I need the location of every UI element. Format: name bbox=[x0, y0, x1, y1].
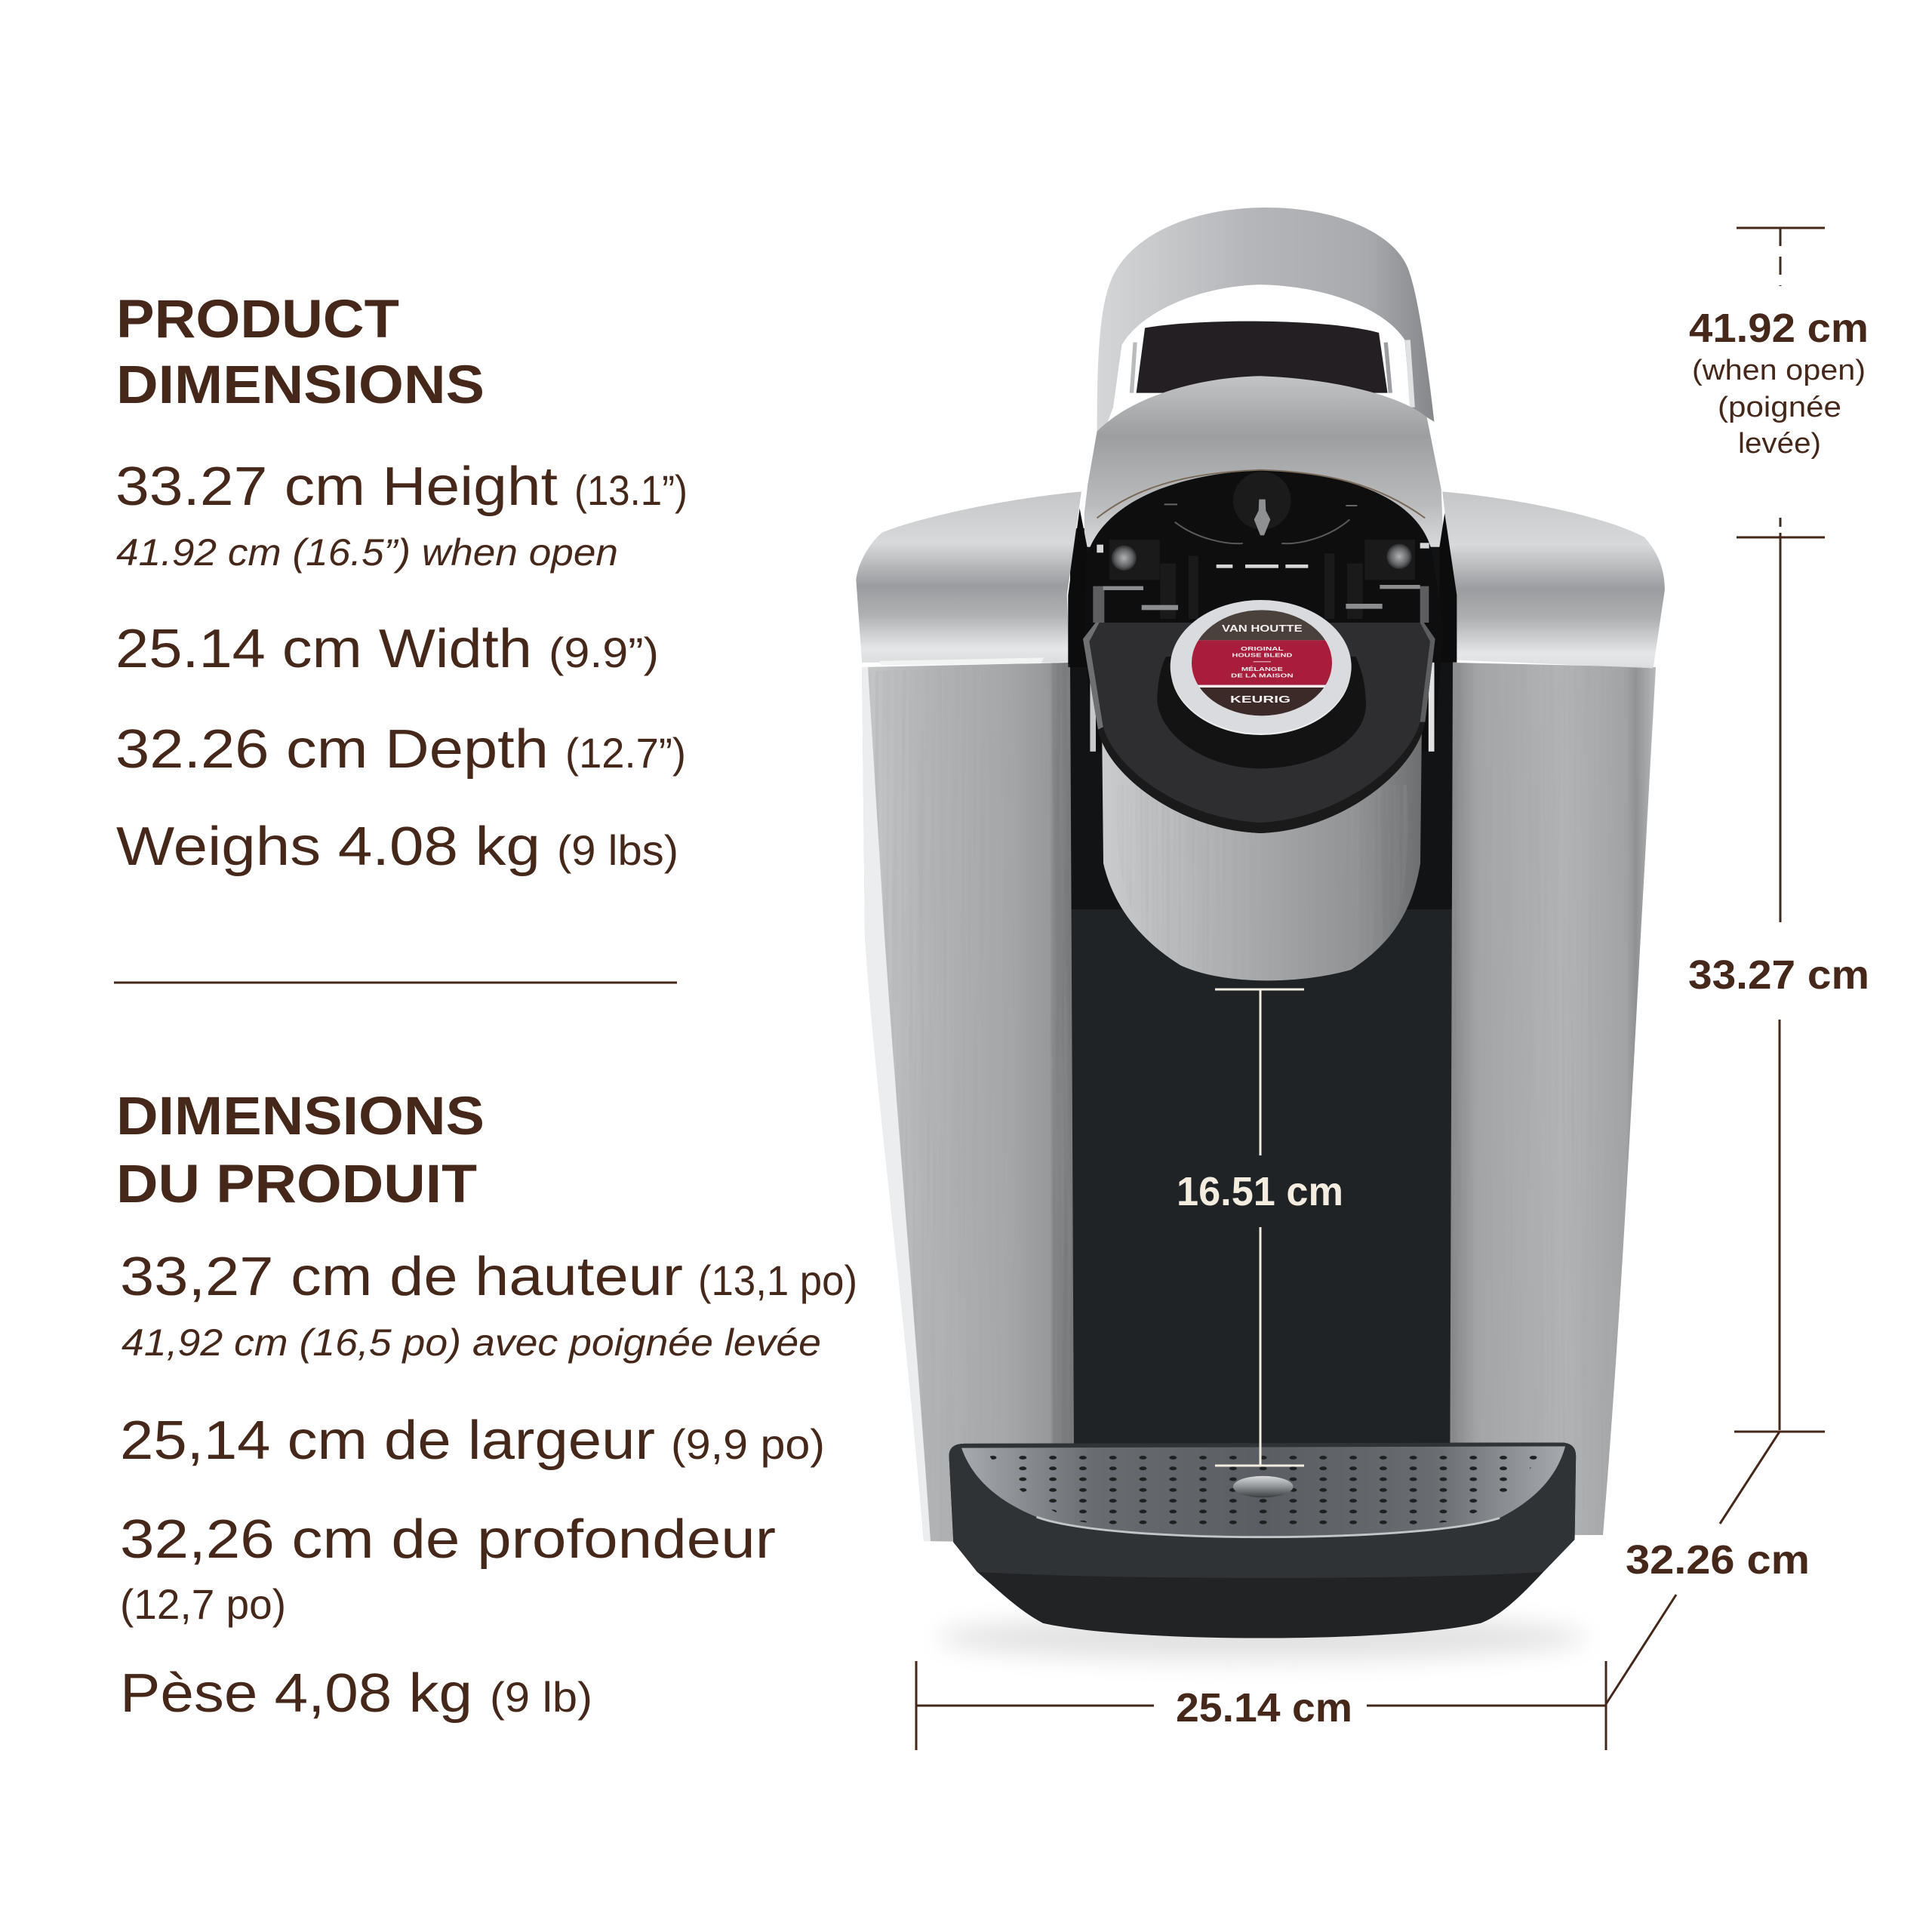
text: width: 25.14 cm Width bbox=[115, 619, 532, 679]
label: 41.92 cm when open: (poignée bbox=[1718, 392, 1841, 423]
label: 33.27 cm: 33.27 cm bbox=[1688, 952, 1869, 998]
drip spout body bbox=[1102, 720, 1422, 980]
text: depth: (12.7”) bbox=[565, 729, 686, 777]
heading: product dimensions: DIMENSIONS bbox=[116, 355, 485, 415]
brew head interior bbox=[1084, 470, 1444, 752]
text: poids: Pèse 4,08 kg bbox=[120, 1663, 472, 1724]
text: height: (13.1”) bbox=[574, 466, 688, 514]
text: profondeur bbox=[120, 1509, 776, 1628]
handle bbox=[1097, 208, 1435, 451]
text: hauteur: 33,27 cm de hauteur bbox=[120, 1247, 683, 1307]
text: hauteur: (13,1 po) bbox=[698, 1257, 857, 1304]
coffee pod: KEURIG bbox=[1230, 694, 1291, 705]
dimension: depth bbox=[1606, 1432, 1810, 1704]
coffee pod bbox=[1171, 600, 1352, 735]
text: profondeur: (12,7 po) bbox=[120, 1580, 286, 1628]
dimension: height bbox=[1688, 537, 1869, 1432]
pod holder basket bbox=[1083, 623, 1435, 833]
text: height when open: 41.92 cm (16.5”) when open bbox=[116, 531, 618, 574]
text: height: 33.27 cm Height bbox=[115, 457, 558, 517]
label: 25.14 cm: 25.14 cm bbox=[1176, 1685, 1352, 1730]
right body panel bbox=[1450, 663, 1656, 1535]
text: hauteur bbox=[120, 1247, 857, 1307]
label: 41.92 cm when open: (when open) bbox=[1692, 355, 1866, 386]
drip tray bbox=[949, 1442, 1576, 1638]
heading: product dimensions: PRODUCT bbox=[116, 290, 399, 349]
label: 32.26 cm: 32.26 cm bbox=[1626, 1537, 1810, 1583]
label: 16.51 cm: 16.51 cm bbox=[1177, 1169, 1343, 1214]
text: depth bbox=[115, 719, 686, 780]
handle rails bbox=[1131, 340, 1412, 408]
text: depth: 32.26 cm Depth bbox=[115, 719, 549, 780]
coffee pod: ORIGINAL bbox=[1241, 645, 1284, 652]
text: poids bbox=[120, 1663, 592, 1724]
label: 41.92 cm when open: 41.92 cm bbox=[1689, 306, 1869, 351]
tray rim bbox=[949, 1442, 1576, 1578]
coffee pod: VAN HOUTTE bbox=[1222, 623, 1303, 634]
coffee pod: HOUSE BLEND bbox=[1232, 651, 1293, 658]
label: 41.92 cm when open: levée) bbox=[1738, 428, 1821, 460]
left body panel bbox=[862, 663, 1074, 1543]
text: weight bbox=[116, 817, 678, 877]
tray grille bbox=[961, 1446, 1565, 1537]
text: largeur: 25,14 cm de largeur bbox=[120, 1411, 655, 1471]
text: poids: (9 lb) bbox=[490, 1673, 592, 1721]
tray base bbox=[949, 1442, 1576, 1638]
text: largeur: (9,9 po) bbox=[671, 1420, 825, 1468]
black side gaps bbox=[1068, 509, 1457, 667]
text: hauteur poignée levée: 41,92 cm (16,5 po) avec poignée levée bbox=[122, 1321, 821, 1364]
label: 41.92 cm when open bbox=[1689, 306, 1869, 460]
text: height bbox=[115, 457, 688, 517]
dimension: handle open height bbox=[1689, 228, 1869, 537]
text: width: (9.9”) bbox=[549, 629, 659, 676]
panel: French product dimensions bbox=[116, 1087, 857, 1724]
text: largeur bbox=[120, 1411, 825, 1471]
text: width bbox=[115, 619, 659, 679]
text: profondeur: 32,26 cm de profondeur bbox=[120, 1509, 776, 1570]
heading: dimensions du produit: DU PRODUIT bbox=[116, 1155, 477, 1214]
floor shadow bbox=[937, 1615, 1586, 1660]
text: weight: (9 lbs) bbox=[557, 826, 678, 874]
coffee pod: MÉLANGE bbox=[1241, 666, 1283, 672]
coffee pod: DE LA MAISON bbox=[1231, 672, 1294, 678]
text: weight: Weighs 4.08 kg bbox=[116, 817, 540, 877]
dimension: width bbox=[916, 1661, 1606, 1750]
coffee machine illustration bbox=[853, 208, 1665, 1660]
black centre panel bbox=[1070, 528, 1453, 1457]
needle and mechanism bbox=[1093, 472, 1429, 623]
heading: dimensions du produit bbox=[116, 1087, 485, 1214]
dimension: cup clearance bbox=[1177, 989, 1343, 1466]
brushed metal texture bbox=[869, 664, 1649, 1260]
lid seam highlight bbox=[879, 657, 1044, 666]
dark lid block bbox=[1137, 321, 1388, 393]
left shoulder bbox=[856, 491, 1081, 663]
drain hole bbox=[1233, 1476, 1293, 1497]
heading: product dimensions bbox=[116, 290, 485, 415]
panel: English product dimensions bbox=[115, 290, 688, 877]
right shoulder bbox=[1442, 491, 1665, 668]
hood bbox=[1084, 376, 1444, 547]
heading: dimensions du produit: DIMENSIONS bbox=[116, 1087, 485, 1146]
